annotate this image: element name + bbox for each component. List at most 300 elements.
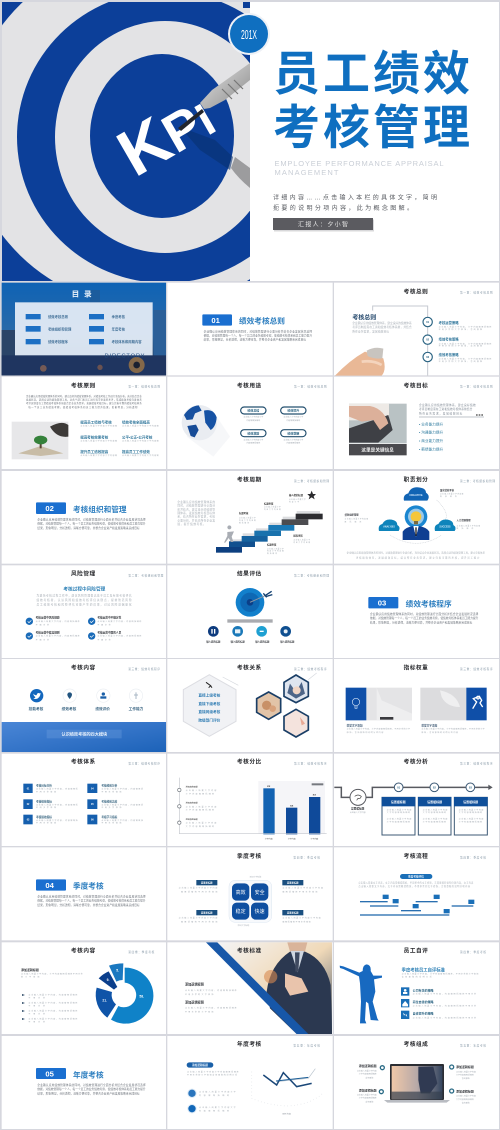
goal description: 所在业务需求，发展绩效目标 [419,411,463,415]
slide: self evaluation [334,942,499,1034]
english subtitle [274,159,444,177]
slide: section 03 [334,565,499,658]
composition labels: 添加逻辑标题 [456,1064,474,1069]
side tags: 点击输入简要文字内容文字内容 [282,885,323,889]
presenter tag: 汇报人：夕小智 [298,220,348,228]
slide: section 03: 结果，形象明显，分析透彻，清晰方便可靠，并整合企业资产和发展策略来完成目标 [370,620,473,624]
donut text: 添加逻辑标题 [21,967,39,972]
weight card captions: 点击输入简要文字内容，文字内容需概括精炼，不用多余的文字 [347,727,410,731]
slide: assessment analysis: 第三章：绩效考核程序 [460,761,493,765]
analysis cards: 文字内容需概括精炼 [387,819,410,823]
rule list: 点击输入简要文字内容文字内容需 [122,438,159,442]
slide: assessment ratio [167,754,333,846]
pill descriptions: 内容需概括精炼 [286,441,300,445]
right weight card [420,688,487,720]
main title: 员工绩效 [273,47,473,100]
slide: assessment goals [334,377,499,469]
slide: annual assessment: 第五章：年度考核 [293,1044,320,1048]
step labels [239,493,310,555]
side tags: 这里是标题 [287,881,299,885]
slide: assessment principles overview: 企业确认应用绩效管理体系，建立良好的绩效体系 [352,321,412,325]
slide: section 03: 依据，对绩效管理每一个人，每一个员工的业务绩效考察，使绩效考核体系和员工能力提升 [370,616,479,620]
slide: assessment relations: 第三章：绩效考核程序 [294,667,327,671]
bullet list: 点击输入简要文字内容，内容需概括精炼 [28,1009,77,1013]
timeline labels: 点击输入简要文字内容，文字内容需概括精炼 [439,325,491,329]
slide: section 03: 03 [378,599,386,608]
evaluation list: 点击输入简要文字内容，内容需概括精炼不用多余 [413,992,476,996]
businessman photo [217,942,332,1034]
icon captions [29,706,144,711]
radar line chart: 图例 内容 [282,1112,291,1116]
slide: assessment composition: 考核组成 [404,1040,428,1048]
slide: assessment rules: 发展状况，选择合适的绩效管理工具，对各个部门和员工进行科学全面的考评，形成绩效考核完善体系 [26,397,142,401]
slide: assessment rules: 每一个员工业务绩效考察，使绩效考核体系和员工能力提升结果，形象明显，分析透彻 [28,405,138,409]
slide: section 05: 依据，对绩效管理每一个人，每一个员工的业务绩效考察，使绩效考核体系和员工能力提升 [37,1087,146,1091]
system list: 点击输入简要文字内容，内容需概括 [36,802,78,806]
target icon [236,588,272,617]
slide: section 04 [2,847,166,940]
role labels: 点击输入简要文字内容需 [440,492,464,495]
donut text: 点击输入简要文字内容，文字内容需概括精炼不用多余 [21,972,83,976]
keyboard photo [349,404,407,443]
slide: assessment content donut: 考核内容 [71,946,96,954]
process arrow [334,783,493,805]
slide: section 04: 企业确认应用绩效管理体系的同时，对绩效管理进行全面分析并结合企业发展状况选择 [37,895,146,899]
timeline: 01 [426,320,430,324]
bullet list: 点击输入简要文字内容，内容需概括精炼 [28,1017,77,1021]
composition labels [357,1063,476,1104]
bar chart: xx [313,793,316,797]
analysis cards: 文字内容需概括精炼 [459,810,482,814]
slide: assessment principles overview: 考核总则 [352,313,376,321]
intro text: 扼要的说明分项内容，此为概念图解。 [273,204,413,212]
icon captions [206,640,295,644]
analysis cards: 点击输入简要文字内容 [387,817,411,821]
composition labels: 言简意赅 [462,1100,470,1104]
slide: risk management: 第二章：考核组织和管理 [128,573,164,577]
slide: assessment system [2,754,166,846]
analysis cards [382,797,488,835]
process arrow: 02 [433,785,436,789]
slide: assessment ratio: 第三章：绩效考核程序 [294,761,327,765]
analysis cards: 文字内容需概括精炼 [423,810,446,814]
analysis cards: 点击输入简要文字内容 [423,817,447,821]
self evaluation heading: 言简意赅的说明分项 [402,975,432,979]
analysis cards: 设置缓标题 [391,799,406,804]
composition labels: 言简意赅 [365,1075,373,1079]
icon captions: 绩效评价 [95,706,110,711]
side tags: 这里是标题 [287,911,299,915]
square numbers: 01 [27,788,30,790]
analysis cards: 设置缓标题 [427,799,442,804]
side tags: 需概括精炼不用多余修饰 [181,889,217,893]
slide: assessment process: 考核流程 [404,852,428,860]
book and tree photo [12,422,68,459]
slide: section 04: 04 [45,881,55,890]
donut chart: 5. [116,968,119,972]
analysis cards: 文字内容需概括精炼 [459,819,482,823]
key info bar: 这里是关键信息 [361,446,394,453]
step labels: 输入您的标题 [289,493,304,497]
slide: result evaluation: 结果评估 [237,570,262,578]
slide: annual assessment: 不用多余的文字修饰言简意赅的说明分项 [187,1073,237,1077]
presenter tag [273,218,374,232]
icon captions: 输入您的标题 [255,640,270,644]
main hexagon: 直接上级考核 [198,693,221,698]
timeline notes: 文字内容需概括精炼 [186,808,214,812]
standard text: 添加逻辑标题 [185,999,205,1004]
contents card: 考核组织和管理 [48,326,72,331]
runner icon [224,525,234,543]
slide: assessment rules: 考核原则 [71,381,96,389]
evaluation list [401,987,476,1020]
start label [350,807,366,814]
step labels: 标题考核 [264,501,274,505]
square numbers: 05 [91,804,94,806]
timeline notes: 文字内容需概括精炼 [186,791,214,795]
side tags: 点击输入简要文字内容文字内容 [282,915,321,919]
goal description: 考评员制度需在工资和绩效考核体系前结合 [419,407,473,411]
composition icons [379,1065,454,1094]
check items: 不需多余 [36,637,49,641]
hand photo [335,348,385,376]
evaluation list: 岗位自省的策略 [413,999,434,1004]
standard text: 添加逻辑标题 [185,982,205,987]
slide: assessment relations: 考核关系 [237,663,262,671]
timeline labels: 绩效考核策略 [439,352,459,357]
slide: assessment cycle [167,471,333,564]
timeline notes [178,785,216,828]
bar chart: xx [290,803,294,807]
contents card: 绩效考核程序 [48,339,69,344]
system list: 考核绩效总结 [101,799,118,803]
slide: assessment cycle: 考核周期 [237,476,262,484]
system list [36,784,143,825]
key info bar [349,444,407,455]
step labels: 点击输入简要文字 [289,498,306,501]
slide: assessment cycle: 析并结合，建立良好的绩效管 [177,507,215,511]
hero right panel [2,2,499,281]
slide: risk management: 为避免考核过程工作中，建议风险管理提高基于员工及有效考核评估 [36,593,132,597]
start label: 设置缓标题 [351,807,365,811]
analysis cards: 点击输入简要文字内容 [459,817,483,821]
timeline: 02 [426,338,430,342]
contents card [15,302,153,355]
slide: section 05 [2,1036,166,1129]
check items: 点击输入简要文字内容，内容概括精炼 [97,619,141,623]
intro text: 详细内容……点击输入本栏的具体文字，简明 [273,194,437,202]
slide: result evaluation [167,565,333,658]
icon captions: 工作能力 [129,706,144,711]
slide: responsibilities: 第二章：考核组织和管理 [460,479,495,483]
analysis cards: 点击输入简要文字内容 [459,807,483,811]
icon captions: 输入您的标题 [206,640,221,644]
slide: assessment goals: 考核目标 [404,381,428,389]
slide: indicator weights: 第三章：绩效考核程序 [460,667,493,671]
slide: assessment analysis [334,754,499,846]
analysis cards: 文字内容需概括精炼 [387,810,410,814]
process arrow: 01 [397,785,401,789]
composition labels: 言简意赅 [462,1076,470,1080]
slide: section 02: 结果，形象明显，分析透彻，清晰方便可靠，并整合企业资产和发展策略来完成目标 [37,526,140,530]
pill descriptions: 点击输入文字内容文字 [243,415,263,419]
donut chart: 9. [107,978,109,982]
main title [273,47,473,154]
evaluation list: 自省提升的策略 [413,1011,434,1016]
radar line chart [252,1069,323,1116]
slide: assessment uses [167,377,333,469]
step labels: 点击输入简要文字 [267,547,284,550]
analysis cards: 点击输入简要文字内容 [387,807,411,811]
composition labels: 点击输入简要文字内容 [456,1069,476,1073]
intro text [273,194,437,212]
slide: assessment rules: 第一章：绩效考核总则 [128,385,160,389]
pill descriptions: 内容需概括精炼 [246,418,260,422]
cloud: creative [404,487,429,501]
standard text: 不用多余的文字修饰 [185,1010,213,1014]
composition labels: 添加逻辑标题 [359,1063,377,1068]
main hexagon: 直接同级考核 [198,709,221,714]
slide: assessment cycle: 第二章：考核组织和管理 [294,479,329,483]
idea person icon [403,505,429,540]
orbit arcs [390,500,446,543]
step labels: 点击输入简要文字 [293,539,310,542]
slide: assessment content donut [2,942,166,1034]
slide: risk management: 员工绩效考核和风险评估可能产生的后果，对比风险基础量化 [36,603,132,607]
system list: 考核绩效指标 [36,815,52,819]
goal list: • 业务能力提升 [419,421,444,426]
side tags: 这里是标题 [201,881,213,885]
slide: assessment principles overview [334,283,499,376]
weight card captions: 荣誉文字添加 [421,723,438,727]
standard text [185,982,237,1014]
timeline: 03 [426,355,430,359]
left weight card [346,688,412,720]
slide rows 1 and 2 [2,283,499,469]
system list: 不用多余修饰 [101,805,121,809]
rule list: 点击输入简要文字内容文字内容需 [122,424,159,428]
icon captions: 技能考核 [29,706,44,711]
rule list: 提高考核效果考核 [80,434,109,439]
numbered squares [23,784,97,824]
slide: assessment uses: 考核用途 [237,381,262,389]
evaluation list: 公司有关的策略 [413,987,434,992]
timeline [373,306,432,376]
bar chart: xx [267,784,271,788]
slide: assessment rules: 考评员制度在工资绩效考核体系前结合企业业务需求，发展绩效考核目标，建立完善可靠的绩效考核体系 [26,401,142,405]
analysis cards: 点击输入简要文字内容 [423,807,447,811]
goal description [419,403,476,415]
slide: assessment principles overview: 第一章：绩效考核总则 [460,291,493,295]
step labels: 内容文字内容需 [267,550,284,553]
slide rows 7 and 8 [2,847,499,1034]
slide: assessment cycle: 展，提升绩效考核。 [177,522,206,526]
composition labels: 点击输入简要文字内容 [357,1068,377,1072]
composition labels: 添加逻辑标题 [359,1087,377,1092]
check items: 不需多余 [97,637,111,641]
step labels: 标题考核 [267,543,277,547]
timeline labels: 不用多余的文字修饰，言简意赅 [439,327,482,331]
process arrow: 03 [469,785,472,789]
contents card: 季度考核 [112,314,126,319]
numbered circles: 点击输入简要文字内容文字 [199,1090,236,1094]
slide: assessment process: 第四章：季度考核 [460,856,486,860]
slide: section 02: 依据，对绩效管理每一个人，每一个员工的业务绩效考察，使绩效考核体系和员工能力提升 [37,522,146,526]
self evaluation heading: 点击输入简要文字内容，文字内容需概括精炼，不用多余的文字修饰 [402,972,478,976]
timeline notes: 添加您的标题 [186,801,198,805]
pill labels: 绩效薪酬 [287,430,299,435]
system list: 点击输入简要文字内容，内容需概括 [101,802,143,806]
system list: 不用多余修饰 [36,821,56,825]
goal list [419,421,444,451]
slide: assessment principles overview: 考评员制度需在工资和绩效考核体系前，并结合 [352,325,412,329]
pill descriptions [243,415,303,445]
system list: 考核绩效指标 [36,799,52,803]
square numbers [27,787,94,822]
slide row 9 [2,1036,499,1129]
slide: assessment process: 点击输入简要文字内容，文字内容需概括精炼，不用多余的文字修饰，言简意赅的说明分项内容 [358,884,471,888]
pill descriptions: 点击输入文字内容文字 [243,437,263,441]
slide: assessment standard [167,942,333,1034]
timeline notes: 添加您的标题 [186,817,198,821]
slide: risk management: 风险管理 [71,570,96,578]
role labels: 人力资源管理 [457,518,471,522]
english subtitle: EMPLOYEE PERFORMANCE APPRAISAL [274,159,444,168]
slide: quarterly assessment: 季度考核 [237,852,262,860]
step labels: 内容文字 [289,500,299,503]
bullet list: 不用多余 [28,995,45,999]
donut text [21,967,83,979]
process pill: 季度考核评估 [408,875,424,879]
slide: assessment rules [2,377,166,469]
slide: section 05: 年度考核 [73,1069,104,1079]
standard text: 点击输入简要文字内容，内容需概括精炼 [185,988,237,992]
donut chart: 21. [102,998,107,1002]
icon captions: 输入您的标题 [231,640,245,644]
goal list: • 商业能力提升 [419,438,444,443]
slide: assessment relations [167,659,333,752]
role labels: 点击输入简要文字内容需 [345,518,368,521]
quadrant block: 添加文字标题 [237,923,249,927]
pill descriptions: 点击输入文字内容文字 [283,437,303,441]
slide: section 05: 企业确认应用绩效管理体系的同时，对绩效管理进行全面分析并结合企业发展状况选择 [37,1083,146,1087]
system list: 考核目标分析 [36,784,52,788]
slide: assessment cycle: 同时，对绩效管理进行全面分 [177,504,215,508]
composition labels: 言简意赅 [365,1099,373,1103]
slide: assessment content donut: 第四章：季度考核 [128,950,155,954]
bullet list [22,993,77,1023]
slide: section 03: 企业确认应用绩效管理体系的同时，对绩效管理进行全面分析并结合企业发展状况选择 [370,612,479,616]
weight card captions [347,723,485,734]
cloud: success [435,520,456,531]
slide rows 3 and 4 [2,471,499,658]
system list: 考核绩效分析 [101,784,118,788]
purpose pills [241,407,306,437]
directory label: DIRECTORY [105,354,145,360]
cloud: creative: CREATIVE [409,493,423,497]
square numbers: 06 [91,820,94,822]
slide: responsibilities [334,471,499,564]
slide: section 02: 考核组织和管理 [73,504,127,514]
staircase chart [216,511,323,553]
slide: assessment goals: 第一章：绩效考核总则 [460,385,493,389]
step labels: 内容文字内容需 [293,541,310,544]
bullet list: 不用多余 [28,1003,45,1007]
slide: quarterly assessment: 第四章：季度考核 [293,856,320,860]
rule list: 点击输入简要文字内容文字内容需 [80,453,117,457]
slide: assessment uses: 第一章：绩效考核总则 [294,385,327,389]
role labels [345,488,480,530]
icon captions: 绩效考核 [62,706,77,711]
slide: assessment system: 考核体系 [71,758,96,766]
main title: 考核管理 [273,101,473,154]
self evaluation heading: 季度考核员工自评标准 [402,966,446,973]
check items: 考核运营中不确定性 [97,616,122,620]
slide: assessment cycle: 理体系，发展绩效考核目标体 [177,511,215,515]
side tags: 点击输入简要文字内容文字内容 [179,885,217,889]
composition labels: 文字内容需概括精炼 [359,1072,377,1076]
weight card captions: 修饰，言简意赅的说明分项内容 [421,730,458,734]
check items [26,616,141,641]
goal list: • 沟通能力提升 [419,430,444,435]
standard text: 不用多余的文字修饰 [185,992,213,996]
side tags: 需概括精炼不用多余修饰 [282,919,311,923]
side tags [179,880,323,923]
slide: assessment process [334,847,499,940]
bar chart: 文字内容 [288,836,296,840]
timeline notes: 点击输入简要文字内容 [186,821,216,825]
slide: section 04: 结果，形象明显，分析透彻，清晰方便可靠，并整合企业资产和发展策略来完成目标 [37,903,140,907]
quadrant block: 添加文字标题 [249,875,261,879]
composition labels: 添加逻辑标题 [456,1088,474,1093]
system list: 不用多余修饰 [101,821,121,825]
weight card captions: 点击输入简要文字内容，文字内容需概括精炼，不用多余的文字 [421,727,485,731]
analysis cards: 设置缓标题 [463,799,478,804]
slide: assessment standard: 考核标准 [237,946,262,954]
heading: 目录 [72,290,96,299]
slide: assessment cycle: 企业确认应用绩效管理体系的 [177,500,215,504]
gantt bars [360,901,473,916]
composition labels: 文字内容需概括精炼 [456,1073,474,1077]
step labels: 概括精炼 [239,521,249,524]
check items: 点击输入简要文字内容，内容概括精炼 [36,634,80,638]
slide: risk management: 考核过程中风险管理 [63,586,106,593]
main hexagon: 直接下级考核 [198,701,221,706]
rule list: 公平•公正•公开考核 [122,434,153,439]
diagonal band [206,942,308,1034]
start label: 点击输入文字内容 [350,810,366,814]
system list: 考核学习指标 [101,815,118,819]
star icon [307,491,316,499]
pill labels [247,408,299,435]
year badge: 201X [241,27,257,42]
english subtitle: MANAGEMENT [274,168,339,177]
contents card: 年度考核 [112,326,126,331]
bar chart [179,778,327,840]
weight card captions: 修饰，言简意赅的说明分项内容 [347,730,383,734]
footer text: 考核绩效体系，发展绩效目标，结合所在业务需求，建立完善可靠的考核，提升员工能力 [356,555,480,559]
icon captions: 输入您的标题 [280,640,295,644]
step labels: 点击输入简要文字 [264,506,281,509]
composition labels: 文字内容需概括精炼 [359,1096,377,1100]
square numbers: 04 [91,787,94,790]
donut chart: 58. [139,994,144,998]
content icons [30,689,143,702]
step labels: 内容文字内容需 [239,519,256,522]
timeline labels: 点击输入简要文字内容，文字内容需概括精炼 [439,341,491,345]
evaluation list: 点击输入简要文字内容，内容需概括精炼不用多余 [413,1016,476,1020]
bullet list: 不用多余 [28,1019,45,1023]
